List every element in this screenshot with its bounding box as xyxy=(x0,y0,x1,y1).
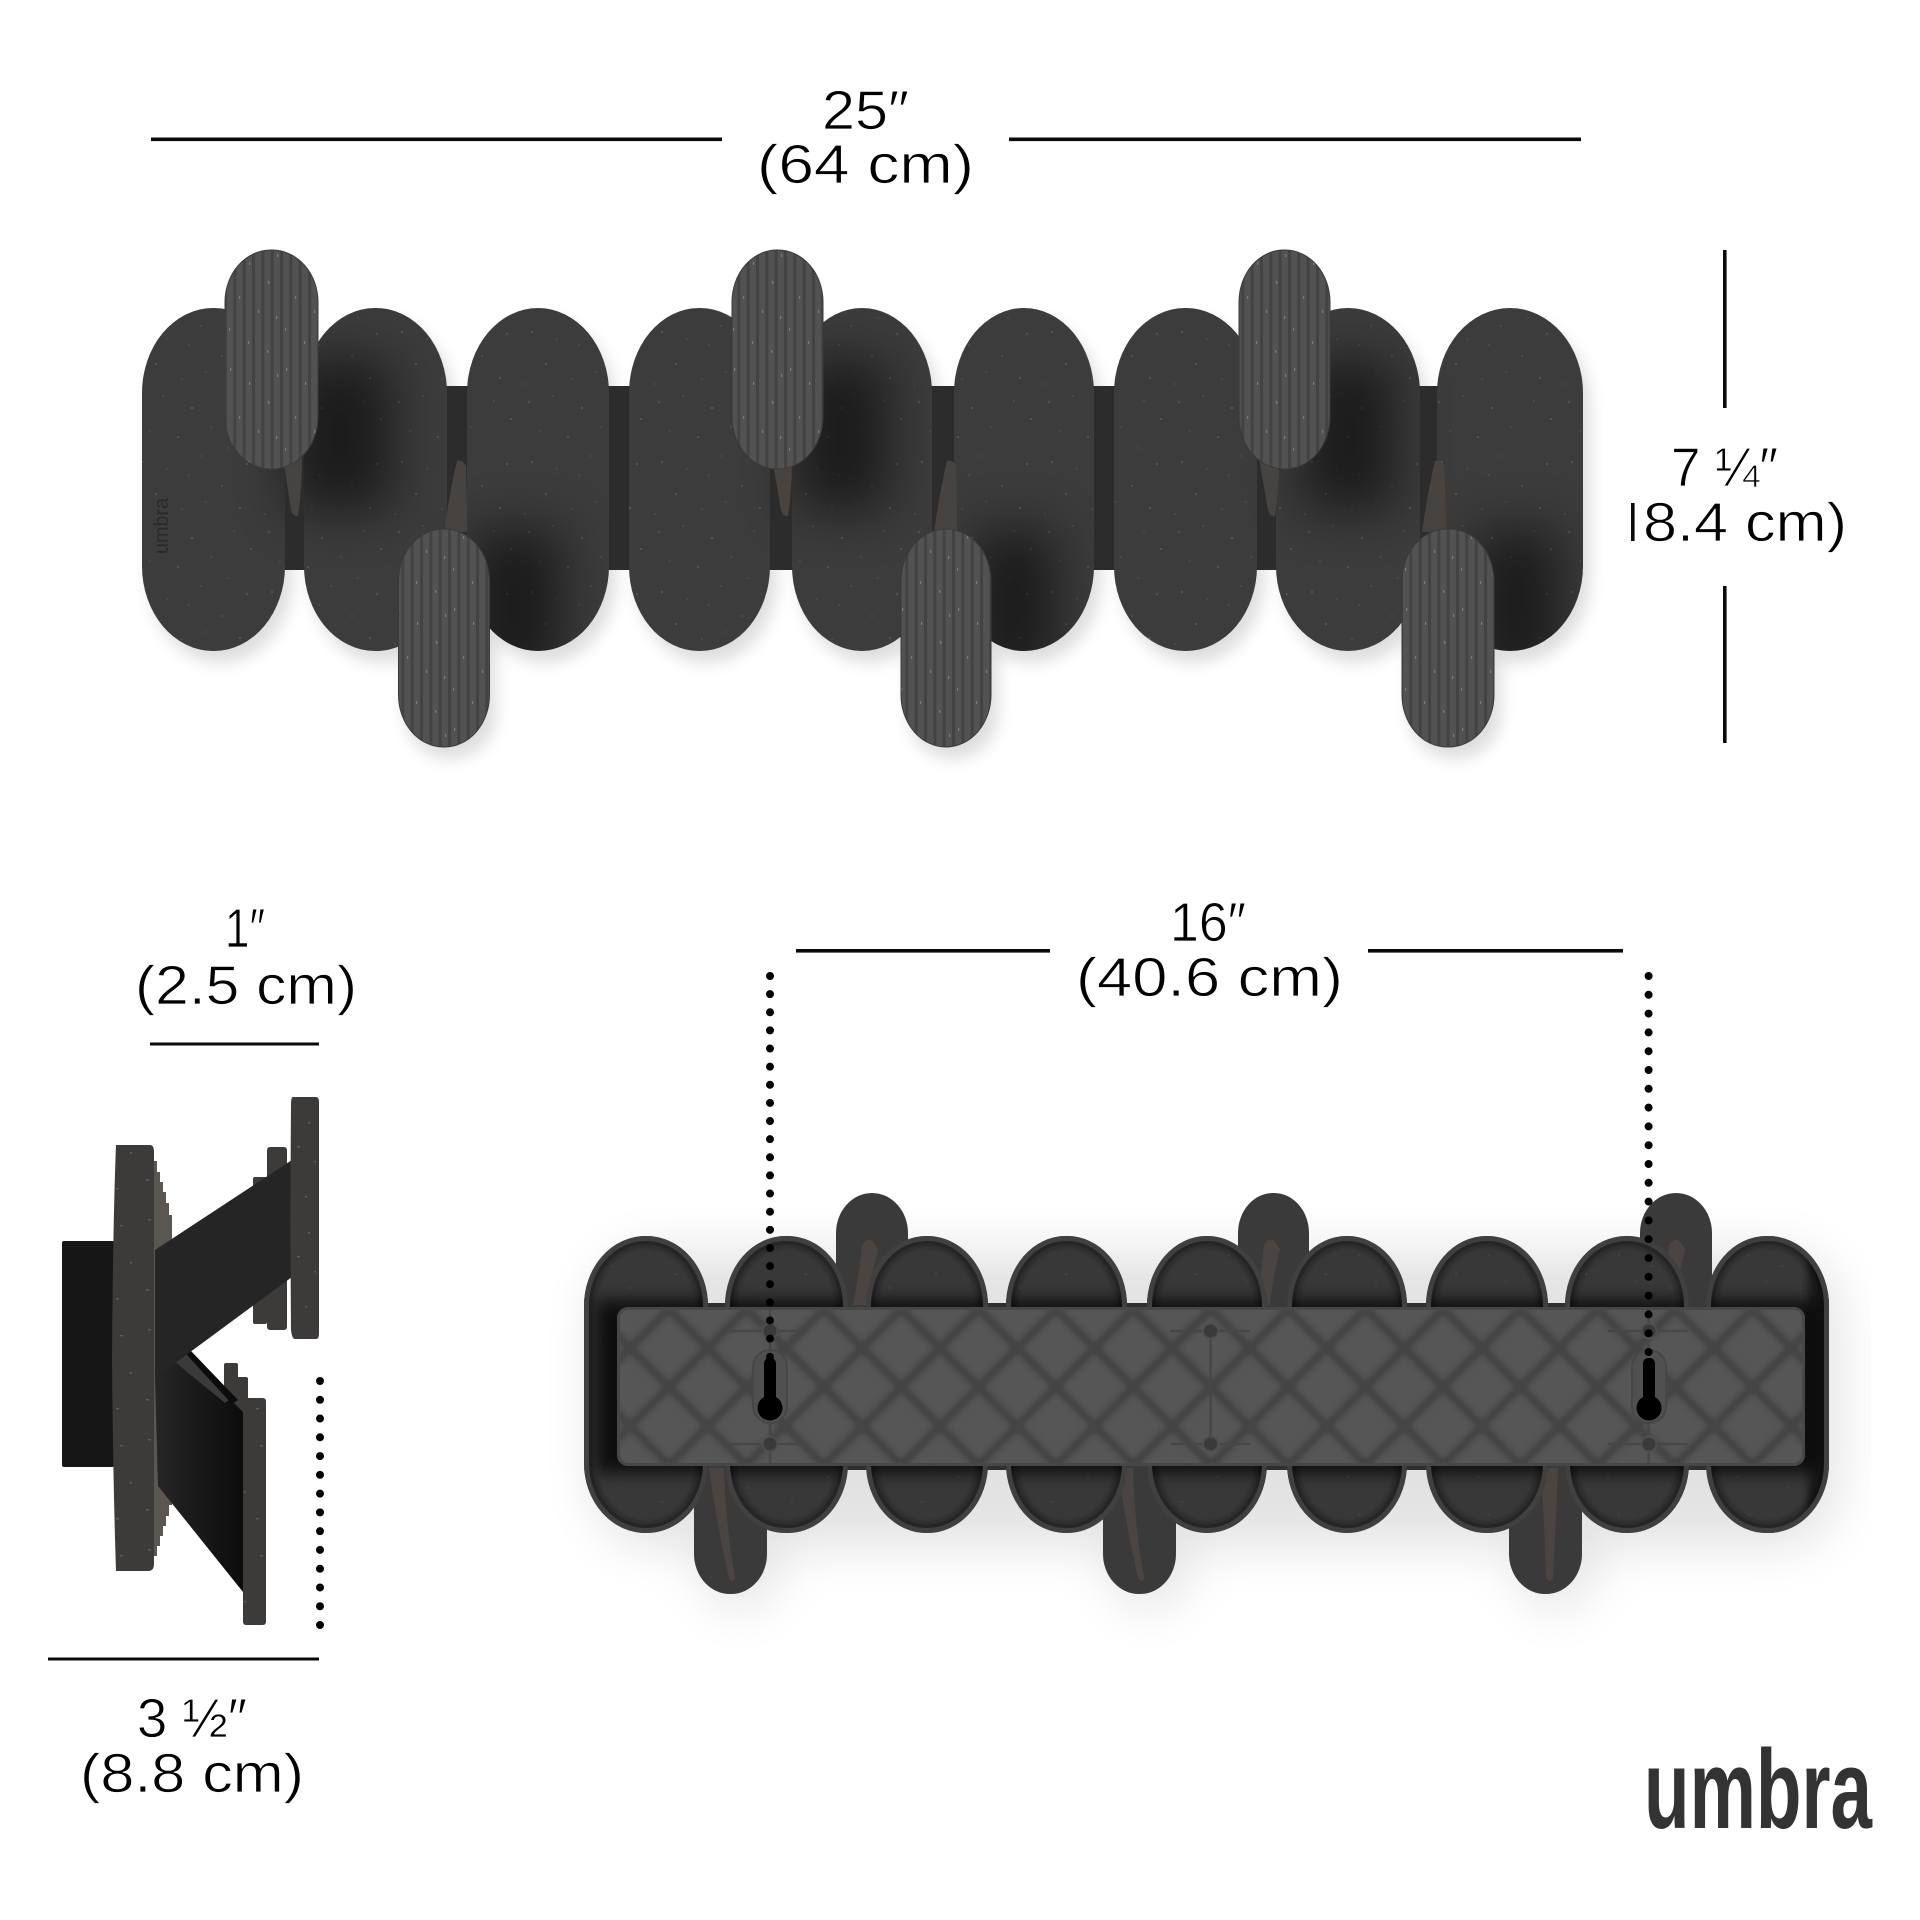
keyhole: right xyxy=(1632,1350,1666,1423)
product: rear view of hook rack xyxy=(584,1193,1839,1608)
dimension: projection 3 1/2 inches: 3 ½″ xyxy=(137,1687,247,1749)
product: side view of hook rack xyxy=(62,1097,319,1625)
product: front view of hook rack xyxy=(142,250,1590,759)
dimension: depth 1 inch xyxy=(135,897,357,1046)
dimension: overall width 25 inches xyxy=(151,79,1581,195)
ribbed hooks xyxy=(225,250,1494,747)
dimension: keyhole spacing 16 inches: 16″ xyxy=(1170,891,1246,953)
dimension: depth 1 inch: 1″ xyxy=(225,897,265,959)
keyhole: left xyxy=(753,1350,787,1423)
dimension: height 7 1/4 inches: (18.4 cm) xyxy=(1589,491,1847,553)
dimension: keyhole spacing 16 inches xyxy=(796,891,1623,1008)
logo embossed on first panel: umbra xyxy=(151,497,173,554)
dimension: projection 3 1/2 inches: (8.8 cm) xyxy=(80,1742,304,1804)
dotted guide: right keyhole xyxy=(1645,976,1653,1354)
rear panel dishes xyxy=(584,1236,1829,1533)
dimension: projection 3 1/2 inches xyxy=(48,1658,319,1804)
dimension: height 7 1/4 inches xyxy=(1631,250,1843,743)
dotted guide: left keyhole xyxy=(766,976,774,1360)
dimension: overall width 25 inches: (64 cm) xyxy=(757,133,974,195)
mounting rail with diamond lattice xyxy=(617,1307,1805,1466)
hook stems xyxy=(283,458,1446,532)
dimension: height 7 1/4 inches: 7 ¼″ xyxy=(1671,436,1778,498)
dimension: depth 1 inch: (2.5 cm) xyxy=(135,954,357,1016)
screw bosses xyxy=(762,1324,1656,1452)
rear hooks xyxy=(694,1193,1712,1594)
dish inner shading xyxy=(590,1242,1829,1527)
dish rims xyxy=(586,1238,1826,1530)
dotted guide: side view hook drop xyxy=(316,1381,324,1628)
rear hook stems xyxy=(709,1240,1685,1581)
dimension: overall width 25 inches: 25″ xyxy=(822,79,909,141)
dimension: keyhole spacing 16 inches: (40.6 cm) xyxy=(1076,946,1343,1008)
